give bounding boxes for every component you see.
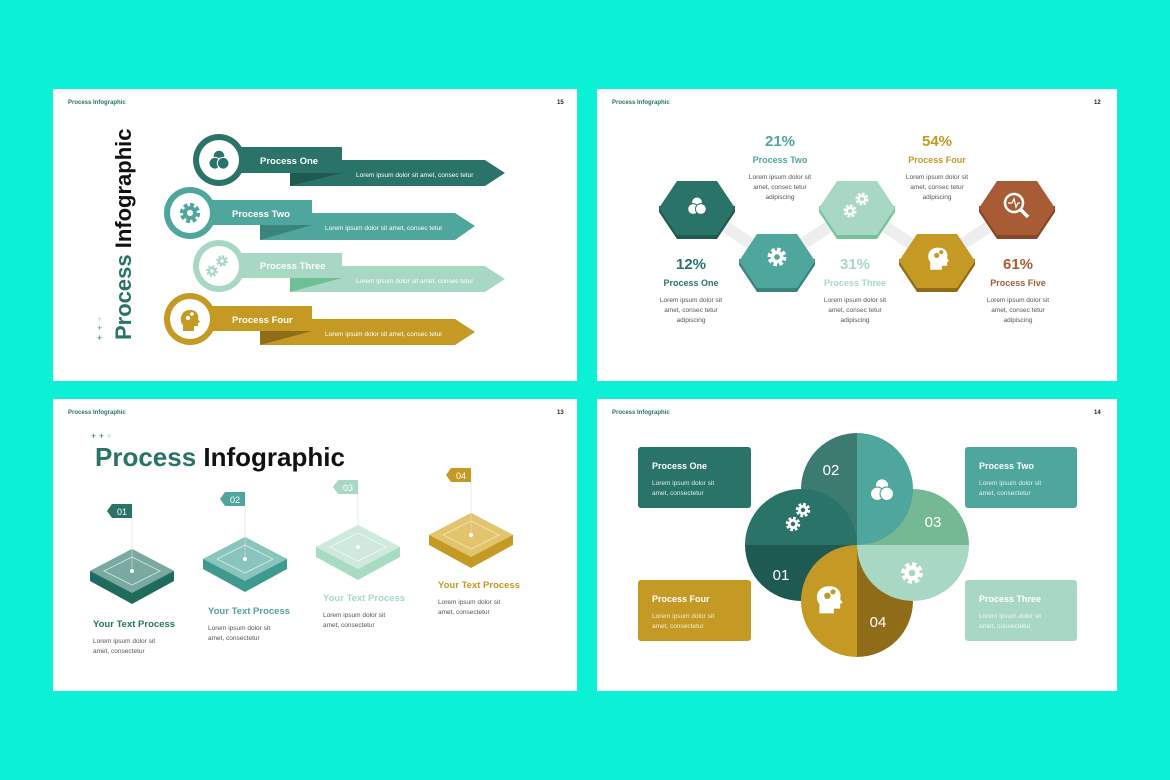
- box: process one: [638, 447, 751, 508]
- stat: 12% process one: amet, consec tetur: [664, 307, 719, 314]
- flower diagram: 02: [823, 462, 839, 479]
- box: process one: Process One: [652, 461, 707, 471]
- stat: 21% process two: 21%: [765, 133, 795, 150]
- row: process two: [164, 187, 475, 240]
- header label: Process Infographic: [68, 410, 126, 416]
- row: process two: Process Two: [232, 209, 290, 220]
- stat: 54% process four: 54%: [922, 133, 952, 150]
- title: Process Infographic: [95, 442, 345, 472]
- stat: 21% process two: Lorem ipsum dolor sit: [749, 174, 811, 181]
- step 04: [429, 468, 520, 616]
- stars: [97, 314, 102, 343]
- row: process two: Lorem ipsum dolor sit amet, consec tetur: [325, 225, 443, 232]
- row: process three: Lorem ipsum dolor sit amet, consec tetur: [356, 278, 474, 285]
- hex 3: [819, 181, 895, 239]
- vertical title: Process Infographic: [111, 128, 136, 340]
- panel: slide 13 isometric steps: [53, 399, 577, 691]
- stars: +: [97, 323, 102, 333]
- flower diagram: 04: [870, 614, 886, 631]
- step 04: Your Text Process: [438, 580, 520, 591]
- stat: 31% process three: 31%: [840, 256, 870, 273]
- step 03: Your Text Process: [323, 593, 405, 604]
- box: process three: amet, consectetur: [979, 623, 1031, 630]
- stat: 21% process two: [749, 133, 811, 201]
- step 02: [203, 492, 290, 642]
- stat: 12% process one: Process One: [663, 278, 719, 288]
- box: process three: [965, 580, 1077, 641]
- step 01: [90, 504, 175, 655]
- page number: 15: [557, 100, 564, 106]
- hex 2: [739, 234, 815, 292]
- box: process three: Lorem ipsum dolor sit: [979, 613, 1041, 620]
- box: process four: amet, consectetur: [652, 623, 704, 630]
- step 02: Your Text Process: [208, 606, 290, 617]
- stars: + + +: [91, 431, 112, 441]
- panel: slide 12 hexagons: [597, 89, 1117, 381]
- row: process three: [193, 240, 505, 292]
- stat: 21% process two: amet, consec tetur: [753, 184, 808, 191]
- stat: 54% process four: amet, consec tetur: [910, 184, 965, 191]
- stat: 12% process one: adipiscing: [677, 317, 706, 324]
- hex 1: [659, 181, 735, 239]
- box: process two: amet, consectetur: [979, 490, 1031, 497]
- stat: 54% process four: Lorem ipsum dolor sit: [906, 174, 968, 181]
- stat: 61% process five: Process Five: [990, 278, 1046, 288]
- step 03: [316, 480, 405, 629]
- box: process three: Process Three: [979, 594, 1041, 604]
- stat: 31% process three: adipiscing: [841, 317, 870, 324]
- row: process one: Process One: [260, 156, 318, 167]
- page number: 13: [557, 410, 564, 416]
- row: process one: Lorem ipsum dolor sit amet, consec tetur: [356, 172, 474, 179]
- row: process four: Lorem ipsum dolor sit amet, consec tetur: [325, 331, 443, 338]
- box: process four: Process Four: [652, 594, 710, 604]
- stat: 12% process one: Lorem ipsum dolor sit: [660, 297, 722, 304]
- stat: 31% process three: Lorem ipsum dolor sit: [824, 297, 886, 304]
- flower diagram: [745, 433, 969, 657]
- step 03: Lorem ipsum dolor sit: [323, 612, 385, 619]
- connectors: [697, 208, 1017, 261]
- flower diagram: 01: [773, 567, 789, 584]
- box: process four: [638, 580, 751, 641]
- box: process four: Lorem ipsum dolor sit: [652, 613, 714, 620]
- header label: Process Infographic: [68, 100, 126, 106]
- panel: slide 15 arrows: [53, 89, 577, 381]
- stat: 54% process four: adipiscing: [923, 194, 952, 201]
- page number: 12: [1094, 100, 1101, 106]
- stat: 61% process five: adipiscing: [1004, 317, 1033, 324]
- row: process three: Process Three: [260, 261, 325, 272]
- box: process two: Process Two: [979, 461, 1034, 471]
- step 02: amet, consectetur: [208, 635, 260, 642]
- stars: +: [97, 333, 102, 343]
- row: process four: [164, 293, 475, 345]
- stat: 31% process three: [824, 256, 886, 324]
- step 04: Lorem ipsum dolor sit: [438, 599, 500, 606]
- step 02: Lorem ipsum dolor sit: [208, 625, 270, 632]
- stat: 12% process one: [660, 256, 722, 324]
- stat: 31% process three: Process Three: [824, 278, 886, 288]
- step 01: amet, consectetur: [93, 648, 145, 655]
- step 02: 02: [230, 495, 240, 505]
- stat: 31% process three: amet, consec tetur: [828, 307, 883, 314]
- step 03: 03: [343, 483, 353, 493]
- box: process two: Lorem ipsum dolor sit: [979, 480, 1041, 487]
- step 01: Your Text Process: [93, 619, 175, 630]
- step 01: 01: [117, 507, 127, 517]
- step 04: 04: [456, 471, 466, 481]
- step 01: Lorem ipsum dolor sit: [93, 638, 155, 645]
- flower diagram: 03: [925, 514, 941, 531]
- row: process four: Process Four: [232, 315, 293, 326]
- box: process one: amet, consectetur: [652, 490, 704, 497]
- stars: +: [97, 314, 102, 324]
- box: process one: Lorem ipsum dolor sit: [652, 480, 714, 487]
- stat: 12% process one: 12%: [676, 256, 706, 273]
- page number: 14: [1094, 410, 1101, 416]
- stat: 21% process two: Process Two: [753, 155, 808, 165]
- header label: Process Infographic: [612, 410, 670, 416]
- stat: 61% process five: [987, 256, 1049, 324]
- stat: 61% process five: amet, consec tetur: [991, 307, 1046, 314]
- panel: slide 14 flower: [597, 399, 1117, 691]
- stat: 54% process four: [906, 133, 968, 201]
- stat: 61% process five: Lorem ipsum dolor sit: [987, 297, 1049, 304]
- stat: 61% process five: 61%: [1003, 256, 1033, 273]
- hex 5: [979, 181, 1055, 239]
- header label: Process Infographic: [612, 100, 670, 106]
- step 03: amet, consectetur: [323, 622, 375, 629]
- box: process two: [965, 447, 1077, 508]
- stat: 21% process two: adipiscing: [766, 194, 795, 201]
- step 04: amet, consectetur: [438, 609, 490, 616]
- row: process one: [193, 134, 505, 186]
- hex 4: [899, 234, 975, 292]
- stat: 54% process four: Process Four: [908, 155, 966, 165]
